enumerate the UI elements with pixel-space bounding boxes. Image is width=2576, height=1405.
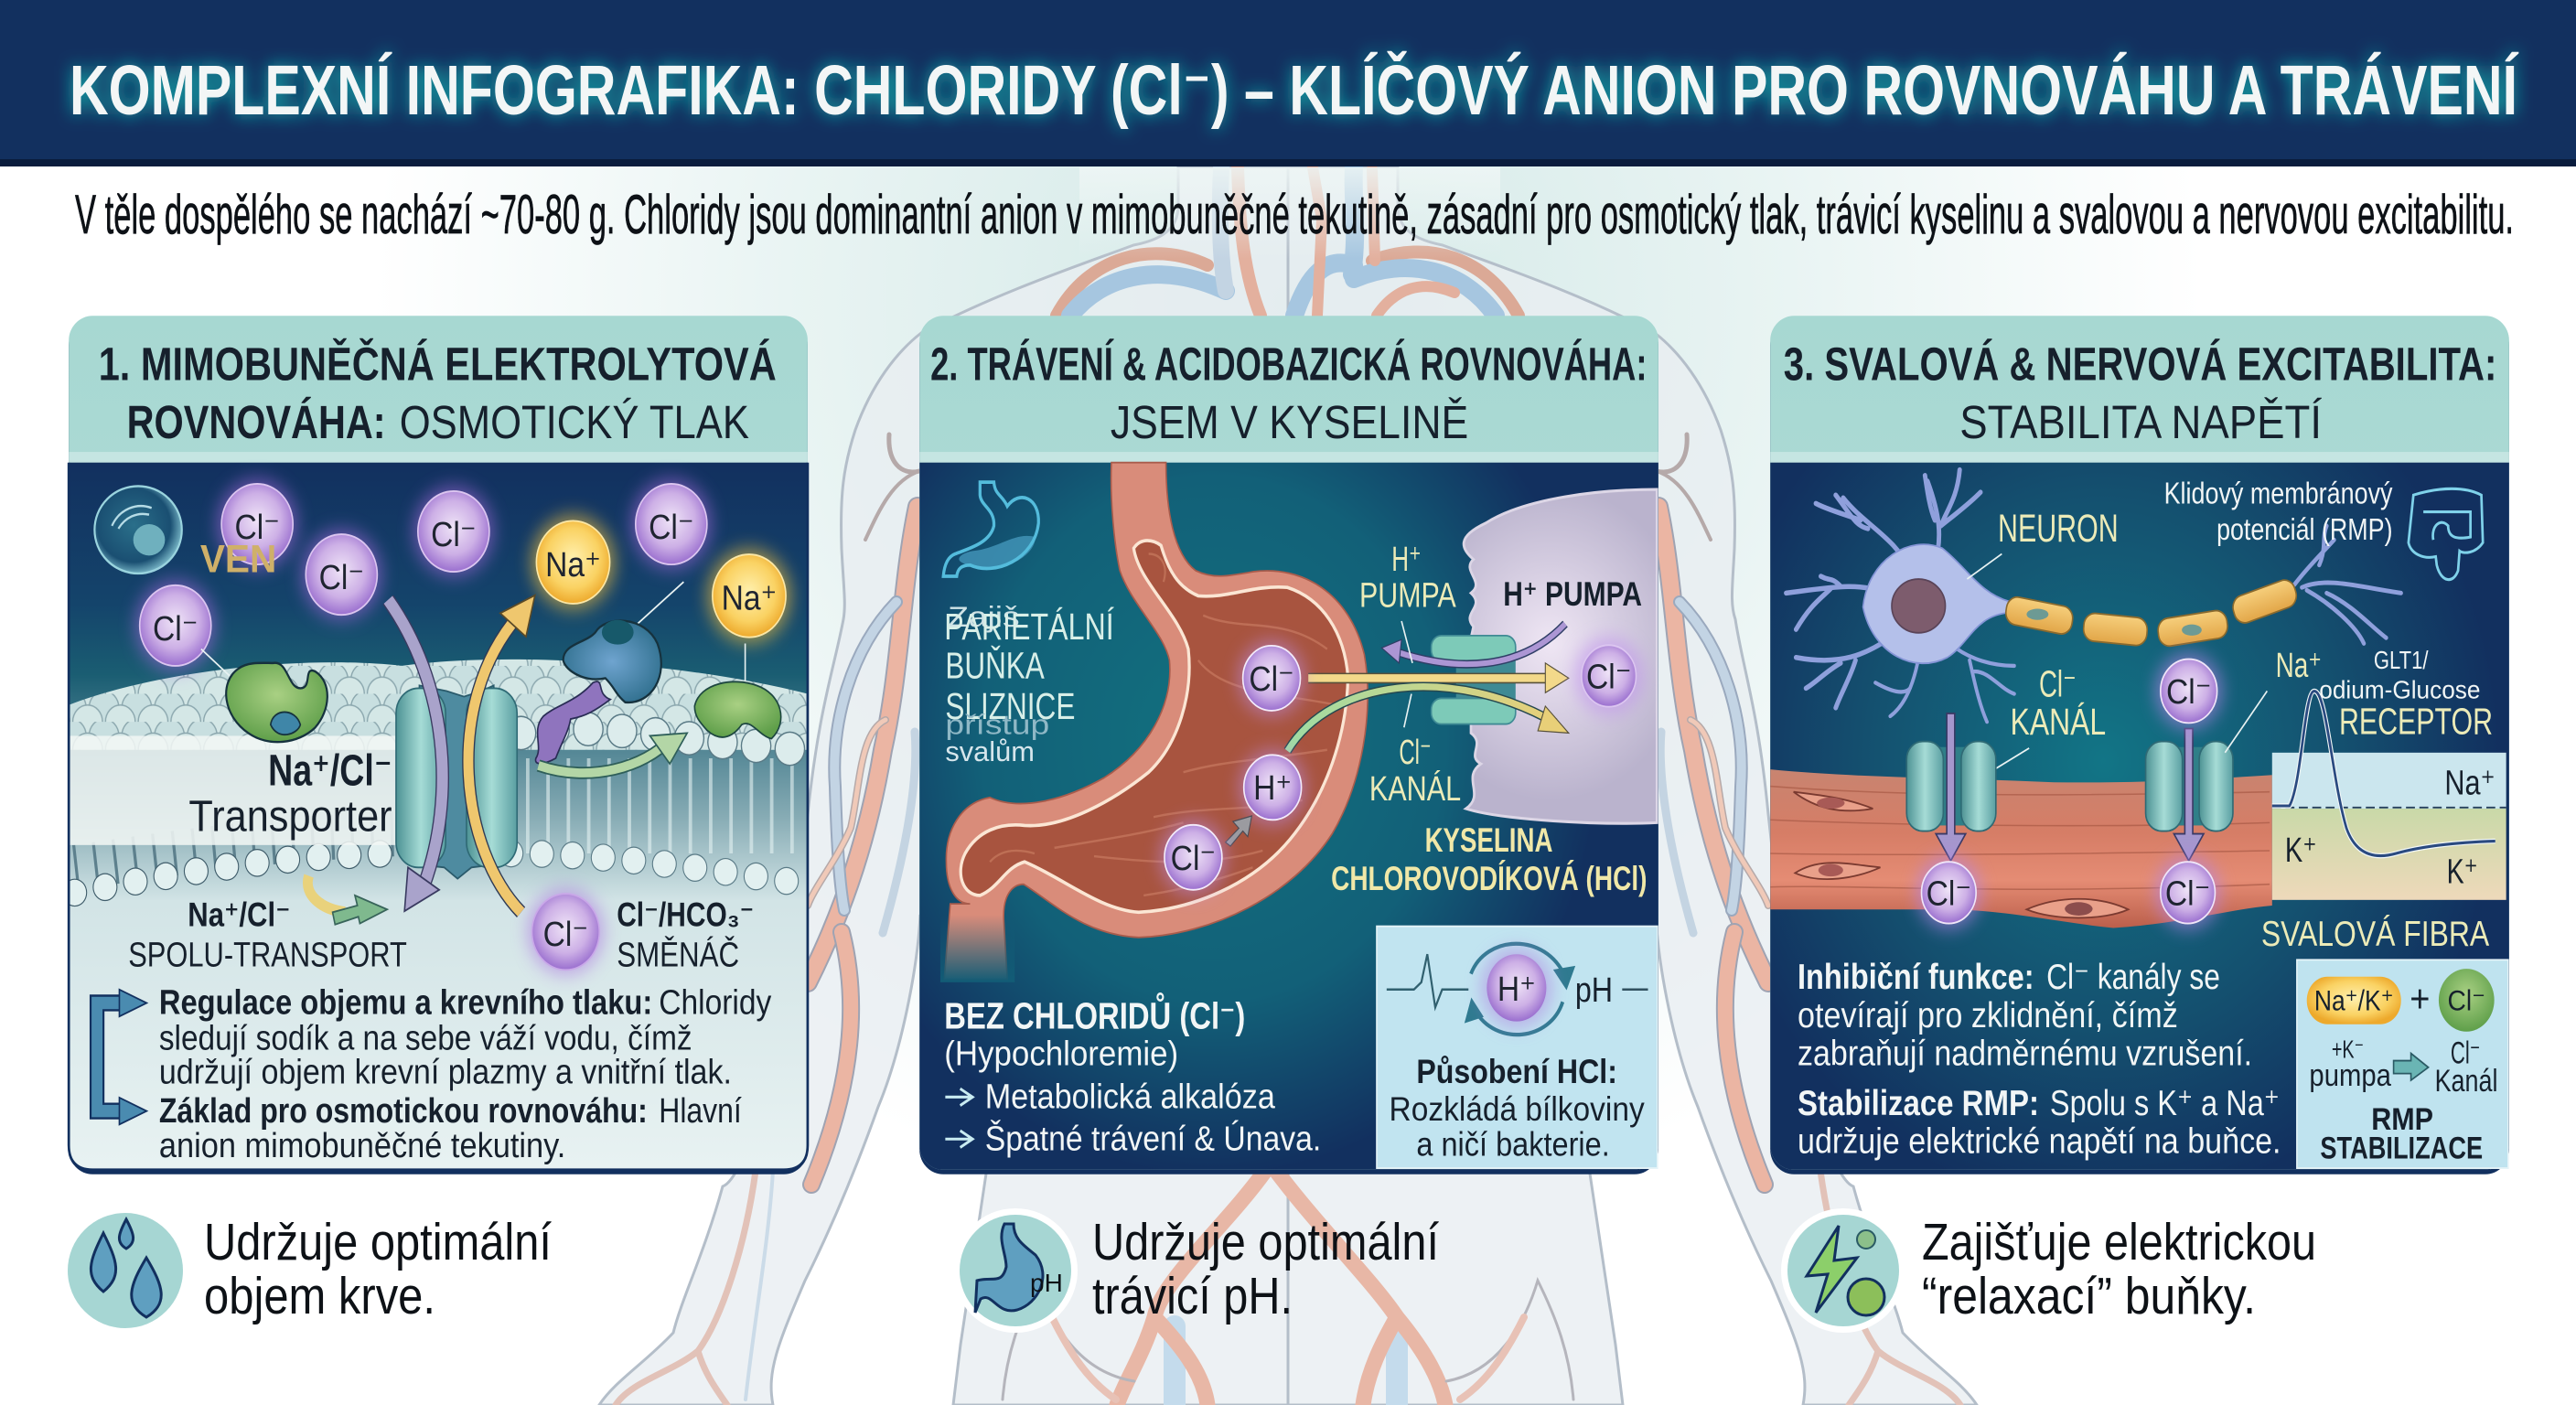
chart: action potential: Na⁺ [2444,764,2496,802]
ion: Cl: Cl⁻ [153,609,198,648]
text: benefit 3 [1922,1213,2316,1325]
text: function description: Hlavní [659,1091,742,1130]
text: inhibitory and RMP: zabraňují nadměrnému vzrušení. [1798,1033,2252,1073]
text: benefit 2: Udržuje optimální [1092,1213,1439,1271]
ion: Cl left: Cl⁻ [1927,874,1971,913]
ion: Na: Na⁺ [722,579,777,617]
label: exchanger [617,897,754,974]
icon: stomach pH [953,1208,1078,1333]
text: inhibitory and RMP: Inhibiční funkce: [1798,957,2034,997]
label: Cl channel: KANÁL [2011,702,2106,744]
ion: Cl top left [217,478,298,570]
box: RMP stabilisation: RMP [2371,1101,2433,1136]
box: RMP stabilisation [2297,960,2508,1168]
box: RMP stabilisation: Na⁺/K⁺ [2314,985,2394,1017]
label: co-transport: Na⁺/Cl⁻ [188,897,290,934]
ion: Cl in stomach: Cl⁻ [1249,660,1294,698]
ion: Cl right [2155,855,2220,929]
label: Cl channel [1994,664,2106,769]
icon: intestine [2409,488,2483,580]
box: RMP stabilisation: + [2410,976,2430,1021]
text: hypochloremia [944,992,1321,1158]
icon: stomach pH: pH [1030,1269,1063,1297]
panel 2: digestion [919,316,1658,1174]
text: inhibitory and RMP: Stabilizace RMP: [1798,1083,2039,1122]
heading: 3. SVALOVÁ & NERVOVÁ EXCITABILITA: [1784,338,2496,391]
text: inhibitory and RMP [1798,957,2281,1161]
label: co-transport [128,897,407,974]
ion H+: H⁺ [1497,970,1536,1008]
label: Cl channel: KANÁL [1369,769,1461,808]
chart: action potential [2272,691,2506,900]
heading [930,338,1647,448]
channel left [1906,742,1996,831]
label: resting membrane potential: Klidový membránový [2164,477,2393,510]
text: function description: udržují objem krevní plazmy a vnitřní tlak. [159,1053,732,1091]
channels on cell membrane [1432,636,1516,724]
text: function description: anion mimobuněčné tekutiny. [159,1126,565,1164]
label band [69,735,397,845]
neuron [1787,470,2401,722]
membrane [69,660,808,893]
ion: Cl: Cl⁻ [431,515,477,553]
ion: Cl right: Cl⁻ [2165,874,2210,913]
arrow: green to yellow curve [1287,687,1569,751]
text: inhibitory and RMP: Cl⁻ kanály se [2046,957,2220,997]
ion: Cl in cell [1574,637,1644,715]
protein: blue and purple pump [535,620,661,764]
ECG line [1387,954,1468,1007]
neck fade [1079,167,1500,259]
ion: Cl lower: Cl⁻ [543,915,588,954]
label: Cl channel: Cl⁻ [1399,733,1432,772]
ion: Cl: Cl⁻ [649,508,694,546]
heading: 1. MIMOBUNĚČNÁ ELEKTROLYTOVÁ [99,338,777,391]
overlapped left label: SLIZNICE [945,686,1075,728]
text: Rozkládá bílkoviny [1390,1091,1645,1129]
label: H+ pump channel: H⁺ [1391,540,1422,578]
ion: Cl in cell: Cl⁻ [1586,658,1631,696]
text: hypochloremia: (Hypochloremie) [944,1035,1178,1073]
left-side vessels [616,434,1397,1405]
heading [1784,338,2496,448]
text: Působení HCl: [1416,1054,1617,1090]
box: RMP stabilisation: Cl⁻ [2448,985,2485,1017]
label: receptor [2319,646,2493,743]
heading: ROVNOVÁHA: [127,396,386,448]
overlapped left label [944,602,1114,767]
text: benefit 2 [1092,1213,1439,1325]
ion: Cl left [1916,855,1981,929]
arrow: co-transport [307,876,387,925]
label: transporter: Na⁺/Cl⁻ [268,745,392,795]
title bar [0,0,2576,166]
label: H+ pump channel [1359,540,1456,615]
label: co-transport: SPOLU-TRANSPORT [128,936,407,974]
text: inhibitory and RMP: udržuje elektrické napětí na buňce. [1798,1121,2281,1161]
ion: Cl lower [527,888,605,975]
text: function description: Regulace objemu a krevního tlaku: [159,983,652,1022]
chart: action potential: K⁺ [2447,853,2478,891]
label: HCl: CHLOROVODÍKOVÁ (HCl) [1331,859,1647,897]
box: RMP stabilisation: pumpa [2309,1057,2391,1092]
text [1390,1054,1645,1164]
text: hypochloremia: Metabolická alkalóza [985,1078,1275,1116]
ion: Cl: Cl⁻ [319,558,364,597]
ion: Cl top: Cl⁻ [2166,672,2211,711]
arrow: Cl into right channel [2174,728,2204,861]
ion: Na: Na⁺ [545,545,601,584]
right-side vessels [1276,434,1960,1405]
label: HCl: KYSELINA [1425,822,1552,860]
arrow: purple H+ out [1381,624,1565,664]
label: transporter [188,745,392,841]
muscle fibre [1770,769,2272,928]
label: exchanger: Cl⁻/HCO₃⁻ [617,897,754,934]
protein: green right [694,681,781,739]
arrow: yellow Cl [1308,663,1569,692]
box: RMP stabilisation: +K⁻ [2332,1035,2364,1064]
arrow: Cl inward [388,600,443,911]
box: HCl effect [1377,927,1658,1168]
text: benefit 3: Zajišťuje elektrickou [1922,1213,2316,1271]
label: transporter: Transporter [188,791,392,841]
label: HCl [1331,822,1647,897]
pointer lines [1401,621,1412,727]
text: function description: sledují sodík a na sebe váží vodu, čímž [159,1018,692,1057]
label: VEN: VEN [200,537,276,581]
label: neuron: NEURON [1998,506,2119,551]
label: resting membrane potential: potenciál (RMP) [2216,513,2393,547]
box: RMP stabilisation: STABILIZACE [2320,1131,2483,1165]
ion: Cl [134,580,216,671]
heading: 2. TRÁVENÍ & ACIDOBAZICKÁ ROVNOVÁHA: [930,338,1647,391]
label: neuron [1967,506,2119,579]
text: benefit 1: objem krve. [204,1267,435,1325]
text: benefit 3: “relaxací” buňky. [1922,1267,2256,1325]
icon: cell [94,486,182,574]
text: benefit 1 [204,1213,552,1325]
ion: H+ in stomach: H⁺ [1253,768,1292,808]
label: muscle fibre: SVALOVÁ FIBRA [2261,914,2489,954]
label: Cl channel [1369,733,1461,808]
ion: Cl lower in stomach [1160,820,1227,896]
icon: water drops [68,1213,183,1328]
heading: STABILITA NAPĚTÍ [1959,396,2322,448]
icon: bolt and apple [1781,1208,1905,1333]
torso and arms, right half [1288,167,1977,1405]
transporter channel [396,685,517,879]
icon: stomach outline [943,482,1038,576]
text: hypochloremia: BEZ CHLORIDŮ (Cl⁻) [944,992,1245,1037]
panel 3: muscle and nerve [1770,316,2509,1174]
text: a ničí bakterie. [1416,1127,1610,1164]
text: function description: Základ pro osmotickou rovnováhu: [159,1091,648,1130]
text: function description [159,983,771,1164]
ion: Cl [301,529,382,620]
box: RMP stabilisation: Kanál [2435,1063,2497,1099]
label: receptor: odium-Glucose [2319,675,2480,704]
label: receptor: RECEPTOR [2339,702,2493,743]
cycle arrows [1467,944,1572,1035]
label: H+ pump: H⁺ PUMPA [1503,576,1642,613]
ion: Cl in stomach [1238,640,1305,716]
heading [99,338,777,448]
overlapped left label: Zajiš [948,602,1020,633]
ion: H+ in stomach [1239,749,1306,825]
label: Na [2225,646,2322,753]
panel 1: extracellular balance [69,316,808,1174]
label: exchanger: SMĚNÁČ [617,936,739,974]
overlapped left label: svalům [945,737,1035,767]
ion H+ [1481,948,1552,1028]
heading: OSMOTICKÝ TLAK [400,396,749,448]
protein: green transporter [201,582,746,742]
box: RMP stabilisation: Cl⁻ [2451,1035,2480,1070]
overlapped left label: PARIETÁLNÍ [944,606,1114,649]
ion: Cl top [2155,653,2223,729]
ion: Cl top left: Cl⁻ [234,508,280,546]
channel right [2146,742,2233,831]
arrow: Cl into left channel [1936,713,1966,861]
text: hypochloremia: Špatné trávení & Únava. [985,1120,1321,1158]
panel outline [69,463,808,1170]
heading: JSEM V KYSELINĚ [1111,396,1468,448]
text: inhibitory and RMP: otevírají pro zklidnění, čímž [1798,995,2178,1035]
ion: Cl [413,486,494,577]
overlapped left label: BUŇKA [945,645,1045,687]
label: H+ pump channel: PUMPA [1359,576,1456,615]
arrow: small grey [1226,816,1251,846]
ion: Na [531,515,616,610]
arrow: bracket [97,990,146,1124]
torso and arms, left half [599,167,1288,1405]
arrow: Na outward [468,595,535,912]
label pH: pH [1575,971,1613,1010]
ion: Na [707,548,791,643]
ion: Cl [630,478,712,570]
stomach [944,463,1368,980]
text: benefit 1: Udržuje optimální [204,1213,552,1271]
overlapped left label: přístup [945,710,1049,741]
label: resting membrane potential [2164,477,2393,547]
text: inhibitory and RMP: Spolu s K⁺ a Na⁺ [2050,1083,2280,1122]
label: Na: Na⁺ [2276,646,2322,685]
chest vessels [1057,167,1519,316]
text: benefit 2: trávicí pH. [1092,1267,1293,1325]
ion: Cl lower in stomach: Cl⁻ [1171,839,1216,877]
arrow: green recycling [539,733,687,773]
label: Cl channel: Cl⁻ [2039,664,2077,705]
duodenum fade [940,915,1014,982]
text: function description: Chloridy [659,983,771,1022]
chart: action potential: K⁺ [2285,831,2317,870]
parietal cell [1464,489,1657,823]
illustration: human body silhouette with vessels [599,167,1977,1405]
label: receptor: GLT1/ [2374,646,2429,674]
